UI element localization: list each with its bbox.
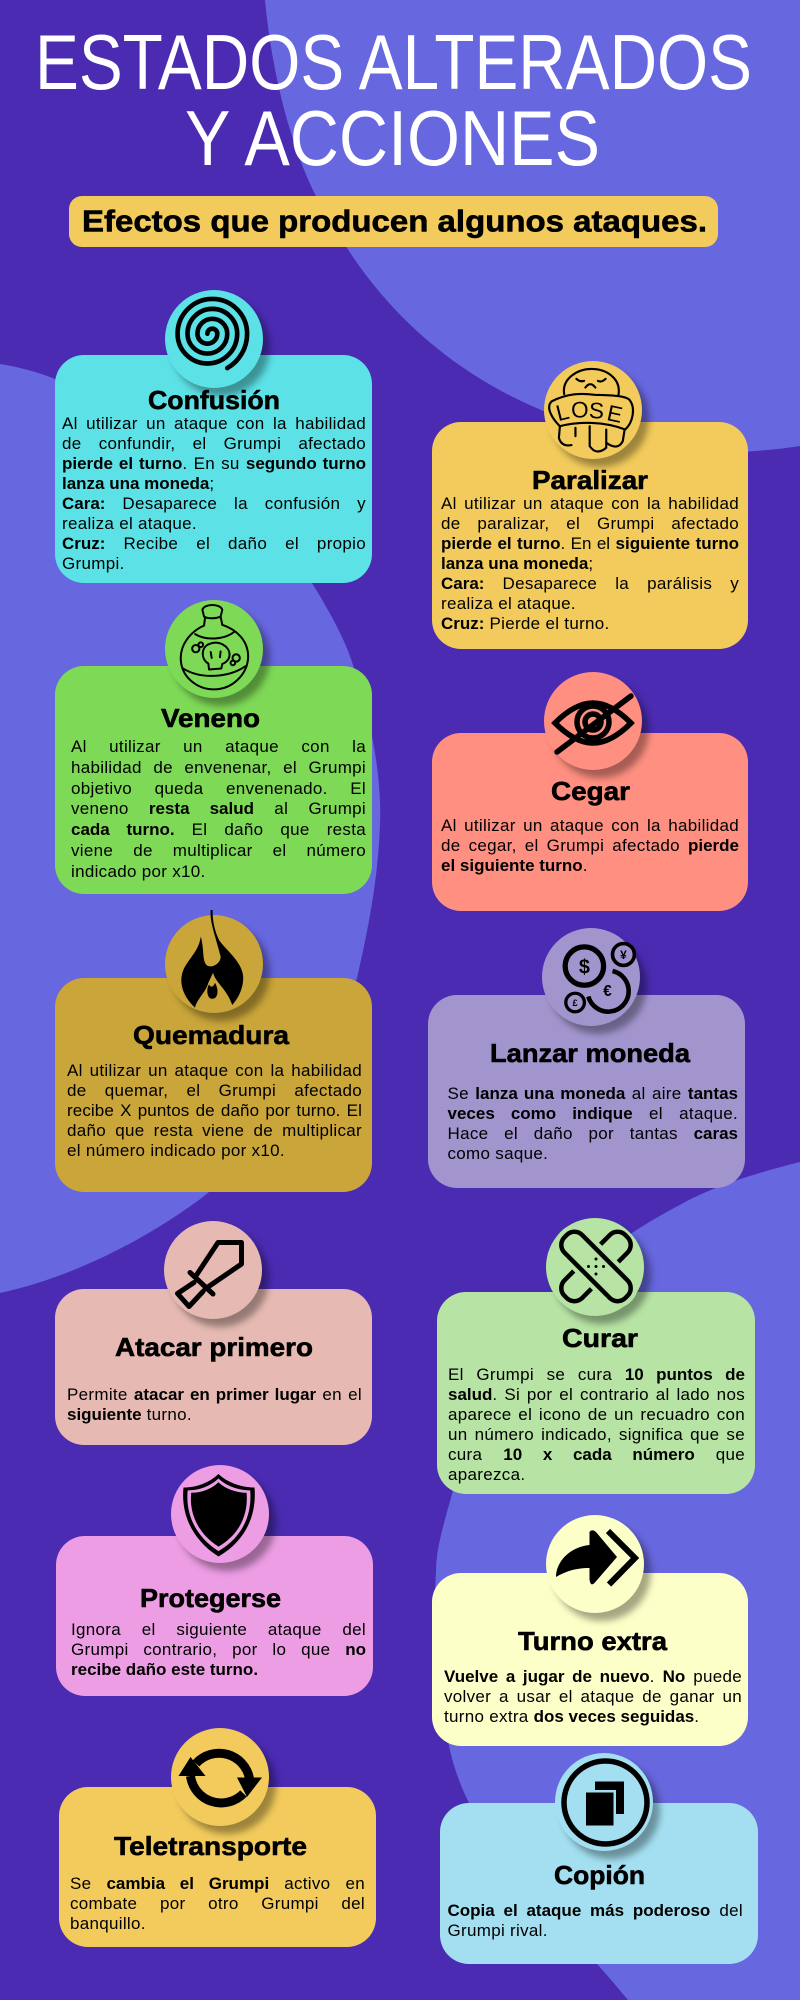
text block: Grumpi contrario, por lo que no <box>71 1640 366 1659</box>
text block: Se cambia el Grumpi activo en <box>70 1874 365 1893</box>
text block: un número indicado, significa que se <box>448 1424 745 1444</box>
icon: coins: £ <box>573 998 579 1008</box>
heading: Curar <box>562 1323 638 1353</box>
text block <box>448 1364 745 1484</box>
icon: shield <box>171 1465 269 1563</box>
text block: recibe daño este turno. <box>71 1660 258 1679</box>
icon: flame <box>164 915 262 1013</box>
text block: realiza el ataque. <box>62 514 197 533</box>
text block <box>448 1084 738 1162</box>
text block: Cara: Desaparece la parálisis y <box>441 574 739 593</box>
text block: Al utilizar un ataque con la <box>71 737 366 756</box>
text block: Al utilizar un ataque con la habilidad <box>67 1061 362 1080</box>
text block: de paralizar, el Grumpi afectado <box>441 514 739 533</box>
panel: Protegerse <box>56 1465 373 1696</box>
text block <box>71 1620 366 1679</box>
text block: viene de multiplicar el número <box>71 841 366 860</box>
text block: recibe X puntos de daño por turno. El <box>67 1101 362 1120</box>
heading: Cegar <box>551 776 630 806</box>
heading: Veneno <box>161 703 260 733</box>
text block: Al utilizar un ataque con la habilidad <box>441 494 739 513</box>
text block: El Grumpi se cura 10 puntos de <box>448 1364 745 1384</box>
text block: combate por otro Grumpi del <box>70 1894 365 1913</box>
panel: Teletransporte <box>59 1728 376 1947</box>
icon: spiral <box>164 290 262 388</box>
panel: Copión <box>440 1753 758 1964</box>
icon: poison bottle <box>164 600 262 698</box>
panel: Turno extra <box>432 1515 748 1746</box>
title <box>35 20 752 180</box>
icon: crossed eye <box>544 672 642 770</box>
icon: sword <box>164 1221 262 1319</box>
text block: salud. Si por el contrario al lado nos <box>448 1384 745 1404</box>
icon: bandage <box>546 1218 644 1316</box>
icon: coins: € <box>603 983 612 1000</box>
text block: pierde el turno. En su segundo turno <box>62 454 366 473</box>
text block: Ignora el siguiente ataque del <box>71 1620 366 1639</box>
text block: Vuelve a jugar de nuevo. No puede <box>444 1666 742 1686</box>
text block: el siguiente turno. <box>441 856 588 875</box>
panel: Atacar primero <box>55 1221 372 1445</box>
text block: Al utilizar un ataque con la habilidad <box>62 414 366 433</box>
panel: Confusión <box>55 290 372 583</box>
text block: banquillo. <box>70 1914 146 1933</box>
text block: indicado por x10. <box>71 862 206 881</box>
text block: Grumpi rival. <box>448 1921 548 1940</box>
text block: lanza una moneda; <box>62 474 214 493</box>
panel: Quemadura <box>55 910 372 1192</box>
text block: Permite atacar en primer lugar en el <box>67 1385 362 1404</box>
text block: aparezca. <box>448 1464 525 1484</box>
text block: Grumpi. <box>62 554 125 573</box>
text block: daño que resta viene de multiplicar <box>67 1121 362 1140</box>
text block: Cruz: Pierde el turno. <box>441 614 610 633</box>
heading: Turno extra <box>518 1626 668 1656</box>
text block <box>441 494 739 633</box>
icon: copy <box>555 1753 653 1851</box>
panel: Cegar <box>432 672 748 911</box>
subtitle pill: Efectos que producen algunos ataques. <box>82 204 707 238</box>
text block: veces como indique el ataque. <box>448 1104 738 1122</box>
icon: lose banner: LOSE <box>553 397 625 428</box>
text block: Cara: Desaparece la confusión y <box>62 494 366 513</box>
text block <box>67 1385 362 1424</box>
text block: veneno resta salud al Grumpi <box>71 799 366 818</box>
text block <box>70 1874 365 1933</box>
text block: objetivo queda envenenado. El <box>71 779 366 798</box>
text block <box>71 737 366 881</box>
text block: siguiente turno. <box>67 1405 192 1424</box>
panel: Veneno <box>55 600 372 894</box>
text block: volver a usar el ataque de ganar un <box>444 1686 742 1706</box>
text block: cura 10 x cada número que <box>448 1444 745 1464</box>
panel: Paralizar <box>432 361 748 649</box>
icon: lose banner <box>544 361 642 459</box>
heading: Lanzar moneda <box>490 1038 691 1068</box>
title: Y ACCIONES <box>185 94 600 180</box>
icon: coins <box>542 928 640 1026</box>
text block <box>62 414 366 573</box>
icon: refresh arrows <box>171 1728 269 1826</box>
icon: coins: ¥ <box>620 948 627 962</box>
text block: aparece el icono de un recuadro con <box>448 1404 745 1424</box>
text block <box>441 816 739 875</box>
text block: de quemar, el Grumpi afectado <box>67 1081 362 1100</box>
icon: forward arrow <box>546 1515 644 1613</box>
subtitle pill <box>69 196 718 247</box>
text block <box>67 1061 362 1160</box>
text block: pierde el turno. En el siguiente turno <box>441 534 739 553</box>
text block: realiza el ataque. <box>441 594 576 613</box>
heading: Copión <box>554 1860 644 1890</box>
text block: Al utilizar un ataque con la habilidad <box>441 816 739 835</box>
text block: Copia el ataque más poderoso del <box>448 1901 743 1920</box>
heading: Protegerse <box>140 1583 281 1613</box>
text block: Hace el daño por tantas caras <box>448 1124 738 1142</box>
heading: Atacar primero <box>115 1332 313 1362</box>
text block: habilidad de envenenar, el Grumpi <box>71 758 366 777</box>
icon: coins: $ <box>579 956 590 978</box>
panel: Curar <box>437 1218 755 1494</box>
heading: Quemadura <box>133 1020 290 1050</box>
text block: Se lanza una moneda al aire tantas <box>448 1084 738 1102</box>
text block: el número indicado por x10. <box>67 1141 285 1160</box>
heading: Confusión <box>148 385 280 415</box>
heading: Teletransporte <box>114 1831 307 1861</box>
text block: cada turno. El daño que resta <box>71 820 366 839</box>
text block: de confundir, el Grumpi afectado <box>62 434 366 453</box>
text block: turno extra dos veces seguidas. <box>444 1706 699 1726</box>
text block <box>448 1901 743 1940</box>
panel: Lanzar moneda <box>428 928 745 1188</box>
text block: Cruz: Recibe el daño el propio <box>62 534 366 553</box>
text block <box>444 1666 742 1726</box>
text block: lanza una moneda; <box>441 554 593 573</box>
text block: de cegar, el Grumpi afectado pierde <box>441 836 739 855</box>
text block: como saque. <box>448 1144 548 1162</box>
heading: Paralizar <box>532 465 648 495</box>
